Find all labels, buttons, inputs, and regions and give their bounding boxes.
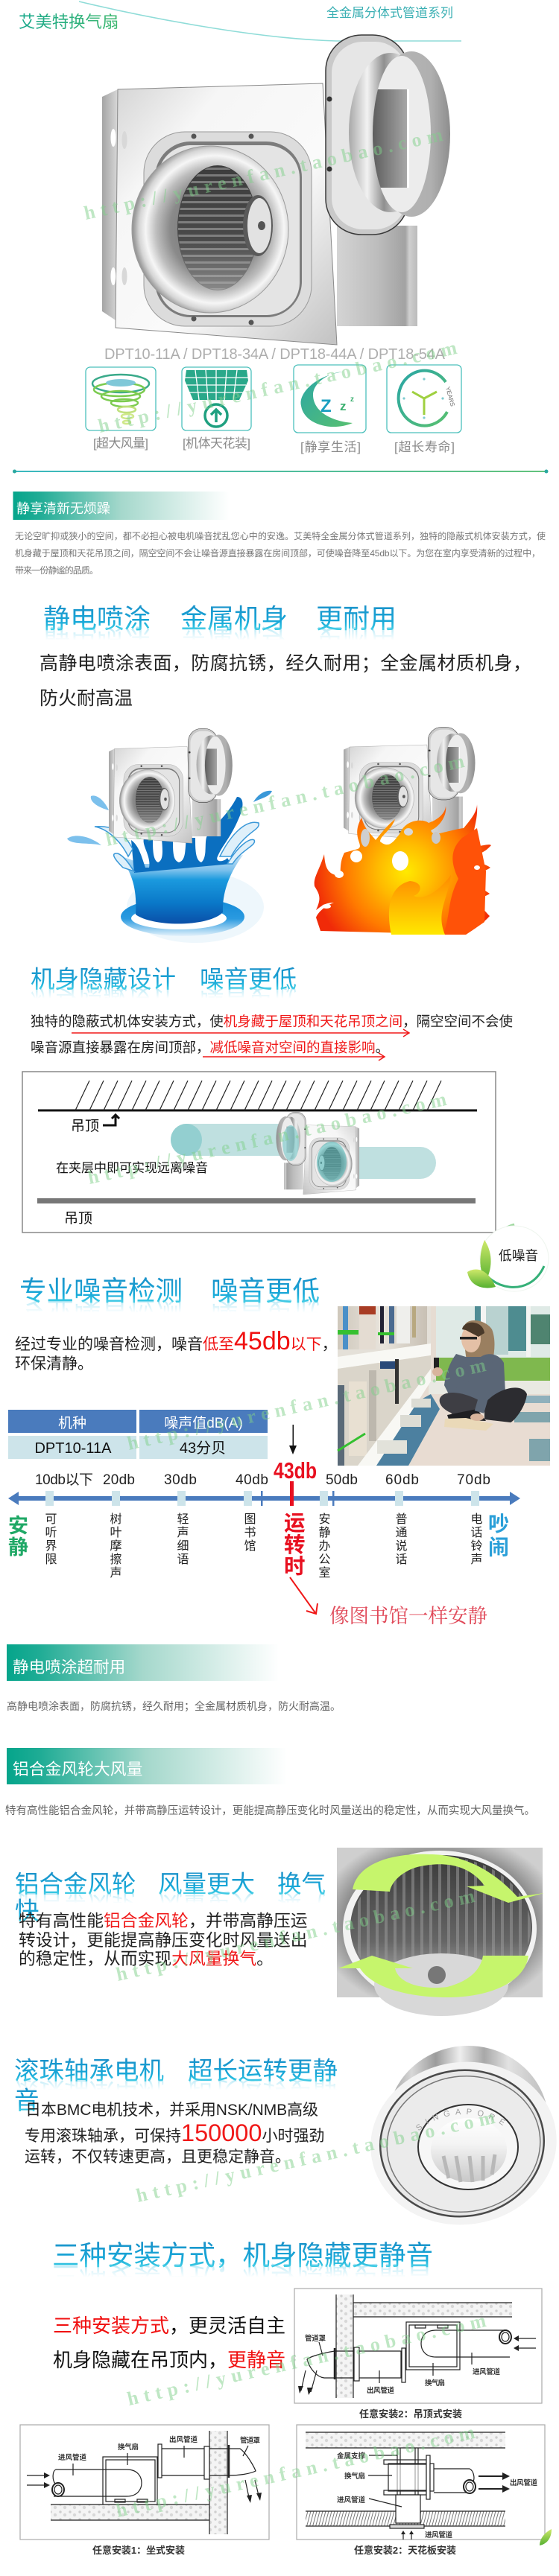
title: noise test: 噪音更低: [211, 1296, 320, 1326]
title: wheel: 铝合金风轮: [15, 1871, 136, 1898]
coating description: 防火耐高温: [40, 688, 133, 709]
red underline arrow two: [203, 1053, 385, 1060]
feature icons: [86, 365, 461, 433]
small green leaf: [540, 2529, 552, 2545]
panel: install diagram ceiling mount: [294, 2289, 542, 2403]
hidden design description: 噪音源直接暴露在房间顶部，减低噪音对空间的直接影响。: [31, 1040, 389, 1055]
noise scale: [8, 1457, 520, 1580]
label running: 时: [284, 1555, 306, 1579]
icon captions: [93, 436, 455, 454]
diagram labels: [58, 2435, 260, 2462]
fan small: [276, 1112, 359, 1195]
diagram labels: [337, 2452, 537, 2540]
label: ceiling top: 吊顶: [71, 1119, 99, 1134]
label noisy: 闹: [488, 1536, 509, 1559]
vertical labels: 安静办公室: [316, 1513, 331, 1580]
coating description: [40, 653, 531, 709]
table: noise value: [8, 1410, 268, 1459]
caption ceiling mount: 任意安装2：吊顶式安装: [359, 2408, 462, 2420]
noise description: [15, 1327, 338, 1373]
red arrow to library note: [290, 1577, 318, 1614]
wheel description: 特有高性能铝合金风轮，并带高静压运: [19, 1911, 308, 1930]
title: three installs: [52, 2240, 433, 2291]
watermarks: http://yurenfan.taobao.com: [82, 124, 445, 224]
icon captions: [超大风量]: [93, 436, 148, 451]
library note: 像图书馆一样安静: [329, 1600, 487, 1629]
watermarks: http://yurenfan.taobao.com: [86, 1088, 449, 1189]
install description: 机身隐藏在吊顶内，更静音: [53, 2349, 285, 2371]
coating description: 高静电喷涂表面，防腐抗锈，经久耐用；全金属材质机身，: [40, 653, 531, 674]
icon: moon sleep: Z: [320, 396, 332, 416]
vertical labels: 树叶摩擦声: [107, 1513, 122, 1580]
intro paragraph: [15, 530, 546, 576]
install description: [53, 2315, 285, 2371]
header curve: [79, 1, 461, 41]
title: three installs: 三种安装方式，机身隐藏更静音: [52, 2260, 433, 2291]
title: coating metal body: 更耐用: [316, 603, 397, 634]
section heading: quiet: [13, 492, 230, 520]
noise description: 环保清静。: [15, 1355, 93, 1373]
scale labels: 60db: [385, 1472, 419, 1488]
arrow: down to 43db: [289, 1425, 297, 1454]
table: noise value: 噪声值dB(A): [164, 1415, 243, 1431]
icon: long life clock: YEARS: [444, 386, 456, 407]
vertical labels: 电话铃声: [468, 1513, 483, 1566]
title: three installs: 三种安装方式，机身隐藏更静音: [52, 2240, 433, 2271]
photo: aluminium wheel: [337, 1848, 544, 2016]
diagram labels: 金属支撑: [337, 2452, 365, 2461]
diagram labels: 换气扇: [344, 2472, 365, 2481]
diagram labels: 出风管道: [510, 2478, 537, 2487]
hidden design description: [31, 1014, 513, 1055]
label: interlayer: 在夹层中即可实现远离噪音: [56, 1161, 208, 1175]
table: noise value: DPT10-11A: [34, 1440, 112, 1457]
title: hidden design: 机身隐藏设计: [31, 984, 176, 1011]
vertical labels: 普通说话: [394, 1513, 407, 1566]
title: hidden design: 机身隐藏设计: [31, 966, 176, 993]
icon: moon sleep: z: [340, 399, 346, 413]
bearing description: 运转，不仅转速更高，且更稳定静音。: [25, 2149, 291, 2166]
hidden design description: 独特的隐蔽式机体安装方式，使机身藏于屋顶和天花吊顶之间，隔空空间不会使: [31, 1014, 513, 1029]
watermarks: http://yurenfan.taobao.com: [134, 2106, 497, 2207]
title: noise test: 噪音更低: [211, 1276, 320, 1306]
diagram labels: 进风管道: [58, 2453, 86, 2462]
watermarks: http://yurenfan.taobao.com: [125, 1354, 488, 1454]
watermarks: http://yurenfan.taobao.com: [125, 2309, 488, 2410]
diagram labels: 管道罩: [305, 2334, 326, 2343]
divider: [13, 469, 549, 474]
vertical labels: 轻声细语: [174, 1513, 189, 1566]
exhaust duct: [353, 1147, 436, 1179]
coating summary: 高静电喷涂表面，防腐抗锈，经久耐用；全金属材质机身，防火耐高温。: [7, 1700, 341, 1713]
icon: corner arrow: [103, 1115, 119, 1125]
vertical labels: 可听界限: [43, 1513, 57, 1566]
panel: install diagram ceiling panel: [297, 2425, 545, 2540]
title: noise test: 专业噪音检测: [19, 1276, 183, 1306]
intro paragraph: 机身藏于屋顶和天花吊顶之间，隔空空间不会让噪音源直接暴露在房间顶部，可使噪音降至45db以下。为您在室内享受清新的过程中，: [15, 547, 540, 559]
scale labels: 50db: [326, 1472, 358, 1488]
table: noise value: 机种: [58, 1415, 86, 1431]
title: coating metal body: [43, 603, 397, 654]
title: noise test: 专业噪音检测: [19, 1296, 183, 1326]
vertical labels: [43, 1513, 483, 1580]
panel: install diagram floor mount: [20, 2425, 269, 2540]
icon captions: [静享生活]: [300, 440, 361, 454]
intro paragraph: 带来一份静谧的品质。: [15, 565, 98, 576]
title: bearing: [14, 2058, 338, 2115]
title: wheel: 快: [15, 1898, 40, 1924]
badge: low noise: [467, 1224, 549, 1291]
series title: 全金属分体式管道系列: [326, 6, 453, 20]
icon captions: [超长寿命]: [394, 440, 455, 454]
value 43db: 43db: [274, 1457, 317, 1483]
scale labels: 30db: [164, 1472, 197, 1488]
photo: ball bearing: SINGAPORE: [416, 2108, 505, 2130]
diagram labels: 出风管道: [169, 2435, 198, 2444]
icon: tornado: [86, 367, 156, 430]
title: coating metal body: 金属机身: [180, 603, 288, 634]
label: ceiling bottom: 吊顶: [64, 1211, 92, 1227]
icon: ceiling mount: [182, 367, 251, 430]
table: noise value: 43分贝: [180, 1440, 226, 1457]
bearing description: 日本BMC电机技术，并采用NSK/NMB高级: [25, 2102, 318, 2119]
watermarks: http://yurenfan.taobao.com: [114, 2421, 477, 2522]
icon: moon sleep: [294, 365, 366, 433]
model numbers: DPT10-11A / DPT18-34A / DPT18-44A / DPT18-54A: [104, 346, 446, 363]
icon: long life clock: [387, 365, 461, 433]
title: bearing: 超长运转更静: [188, 2075, 338, 2102]
watermarks: http://yurenfan.taobao.com: [114, 1885, 477, 1985]
icon: moon sleep: z: [350, 395, 354, 404]
label quiet: 安: [8, 1515, 28, 1537]
brand title: 艾美特换气扇: [19, 13, 119, 31]
diagram labels: 管道罩: [240, 2436, 260, 2445]
section heading: coating: 静电喷涂超耐用: [13, 1658, 125, 1676]
title: bearing: 超长运转更静: [188, 2058, 338, 2085]
axis: [8, 1491, 520, 1506]
caption floor mount: 任意安装1：坐式安装: [92, 2545, 185, 2556]
scale labels: [35, 1472, 490, 1488]
noise description: 经过专业的噪音检测，噪音低至45db以下，: [15, 1327, 338, 1355]
title: bearing: 滚珠轴承电机: [14, 2075, 164, 2102]
section heading: wheel: 铝合金风轮大风量: [13, 1760, 142, 1778]
title: coating metal body: 静电喷涂: [43, 623, 151, 654]
wheel summary: 特有高性能铝合金风轮，并带高静压运转设计，更能提高静压变化时风量送出的稳定性，从而实现大风量换气。: [5, 1804, 535, 1817]
title: wheel: 风量更大: [158, 1871, 255, 1898]
title: hidden design: 噪音更低: [200, 966, 297, 993]
bearing description: [25, 2102, 324, 2166]
watermarks: [82, 124, 497, 2522]
title: bearing: 音: [14, 2087, 39, 2115]
diagram labels: 换气扇: [425, 2379, 445, 2388]
section heading: coating: [7, 1644, 279, 1681]
install description: 三种安装方式，更灵活自主: [53, 2315, 285, 2337]
scale labels: 70db: [457, 1472, 490, 1488]
photo: ball bearing: [371, 2046, 556, 2225]
label noisy: 吵: [488, 1513, 509, 1536]
vertical labels: 图书馆: [241, 1513, 256, 1553]
title: coating metal body: 更耐用: [316, 623, 397, 654]
title: coating metal body: 静电喷涂: [43, 603, 151, 634]
diagram labels: 进风管道: [425, 2531, 452, 2540]
icon captions: [机体天花装]: [183, 436, 250, 451]
title: hidden design: [31, 966, 297, 1011]
section heading: wheel: [7, 1748, 287, 1784]
diagram labels: 出风管道: [367, 2386, 394, 2395]
diagram labels: 进风管道: [337, 2496, 365, 2505]
title: wheel: 换气: [277, 1871, 326, 1898]
watermarks: http://yurenfan.taobao.com: [96, 337, 459, 437]
scale labels: 10db以下: [35, 1472, 93, 1488]
panel: ceiling diagram: [22, 1072, 496, 1233]
diagram labels: [305, 2334, 500, 2395]
title: wheel: 风量更大: [158, 1889, 255, 1915]
main product fan: [102, 35, 450, 345]
illustration: fan in water: [67, 728, 272, 943]
title: hidden design: 噪音更低: [200, 984, 297, 1011]
intake duct: [171, 1124, 286, 1156]
badge: low noise: 低噪音: [499, 1248, 538, 1263]
section heading: quiet: 静享清新无烦躁: [16, 501, 110, 516]
watermarks: http://yurenfan.taobao.com: [104, 750, 467, 850]
scale labels: 20db: [103, 1472, 135, 1488]
title: coating metal body: 金属机身: [180, 623, 288, 654]
title: wheel: [15, 1871, 326, 1924]
label quiet: 静: [8, 1536, 28, 1559]
label running: 转: [284, 1533, 306, 1557]
title: noise test: [19, 1276, 320, 1326]
scale labels: 40db: [236, 1472, 268, 1488]
label running: 运: [284, 1512, 306, 1536]
title: wheel: 换气: [277, 1889, 326, 1915]
wheel description: 转设计，更能提高静压变化时风量送出: [19, 1930, 308, 1950]
diagram labels: 进风管道: [473, 2367, 500, 2376]
photo: woman reading: [338, 1306, 550, 1466]
diagram labels: 换气扇: [118, 2443, 139, 2452]
bearing description: 专用滚珠轴承，可保持150000小时强劲: [25, 2119, 324, 2146]
title: wheel: 铝合金风轮: [15, 1889, 136, 1915]
wheel description: [19, 1911, 308, 1968]
red underline arrow one: [72, 1029, 409, 1037]
caption ceiling panel: 任意安装2：天花板安装: [354, 2545, 456, 2556]
illustration: fan in fire: [315, 727, 491, 935]
intro paragraph: 无论空旷抑或狭小的空间，都不必担心被电机噪音扰乱您心中的安逸。艾美特全金属分体式管道系列，独特的隐蔽式机体安装方式，使: [15, 530, 546, 541]
wheel description: 的稳定性，从而实现大风量换气。: [19, 1949, 274, 1968]
title: bearing: 滚珠轴承电机: [14, 2058, 164, 2085]
